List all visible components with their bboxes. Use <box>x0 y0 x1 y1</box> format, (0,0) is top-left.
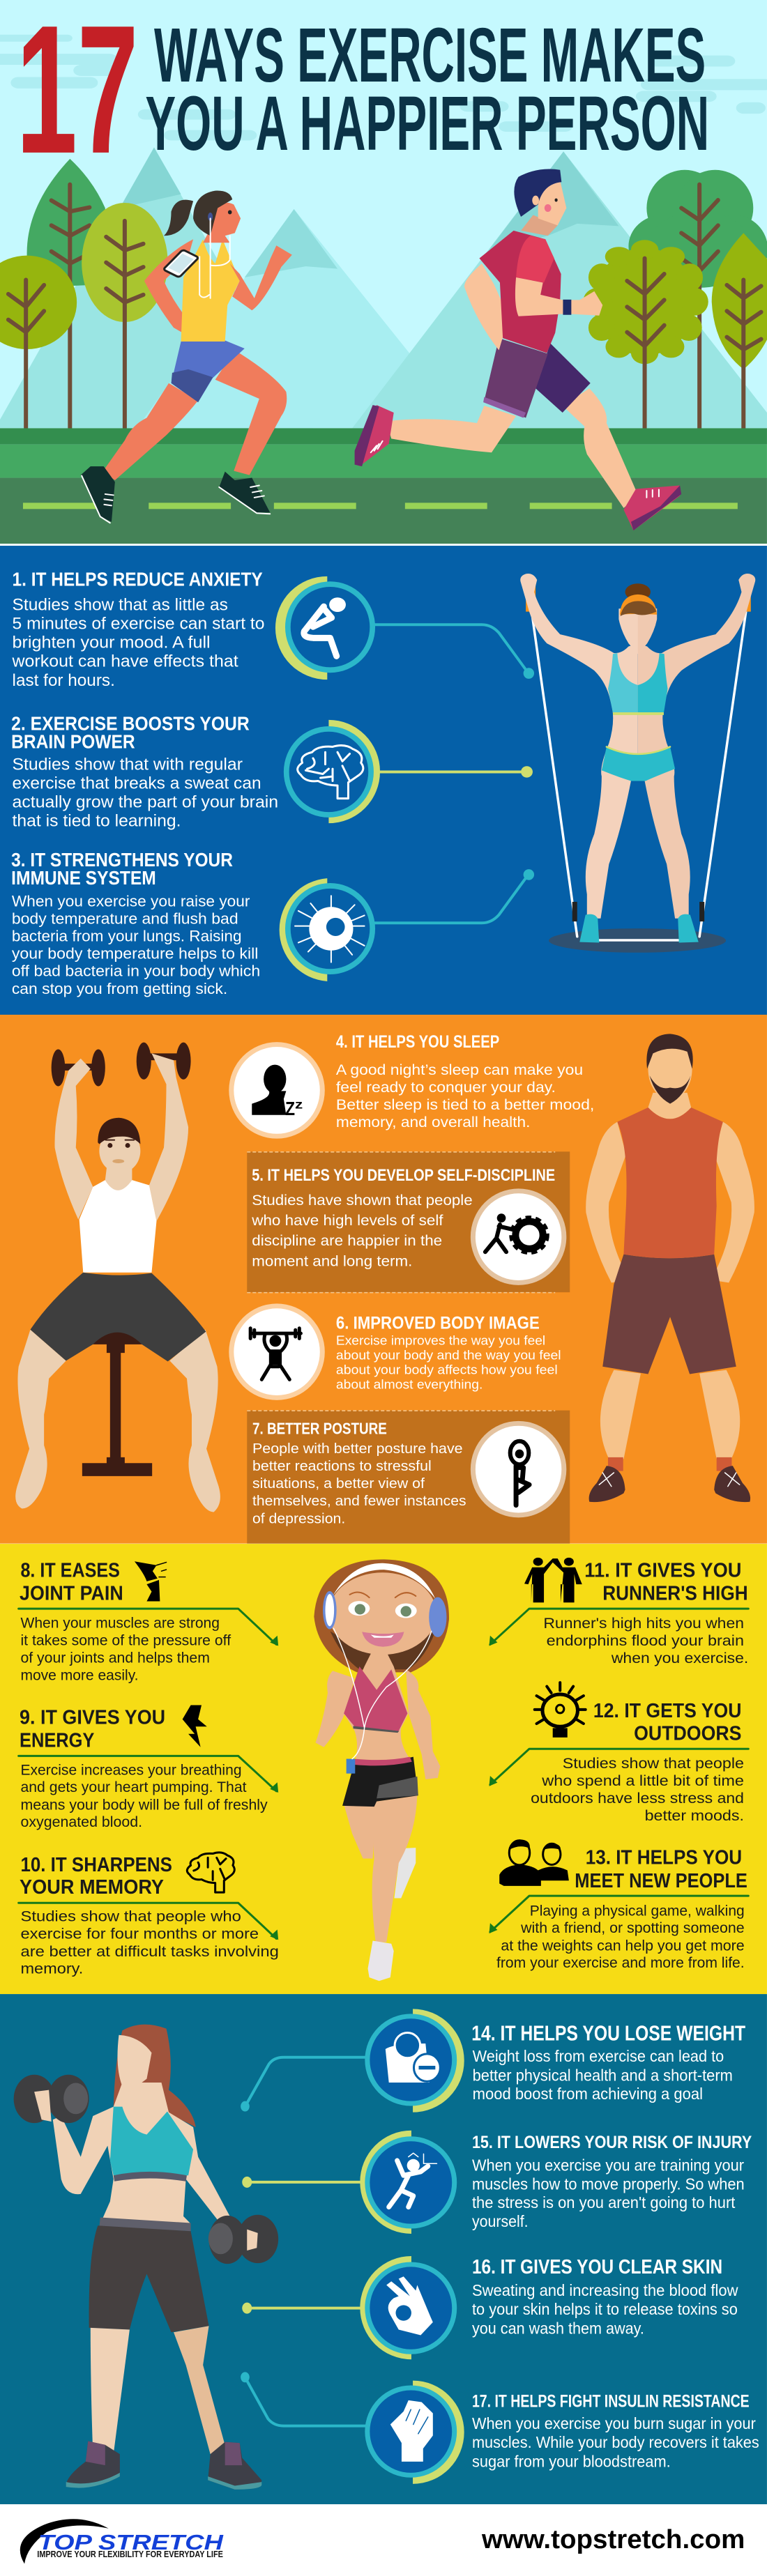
tip 1 <box>12 569 265 689</box>
text block 2: actually grow the part of your brain <box>13 792 278 811</box>
panel: brown box tip 7 <box>247 1411 570 1544</box>
text block 4: Better sleep is tied to a better mood, <box>336 1096 594 1113</box>
illustration: female runner <box>81 191 292 523</box>
text block 5: who have high levels of self <box>251 1211 443 1229</box>
heading 9 <box>20 1706 165 1751</box>
text block 7: People with better posture have <box>252 1441 463 1457</box>
heading 5: 5. IT HELPS YOU DEVELOP SELF-DISCIPLINE <box>252 1166 555 1185</box>
text block 3: can stop you from getting sick. <box>12 980 227 997</box>
text block 17: sugar from your bloodstream. <box>472 2452 671 2470</box>
heading 11 <box>584 1559 748 1604</box>
text block 2: Studies show that with regular <box>13 754 243 774</box>
icon: sleep <box>229 1042 325 1139</box>
icon: person pushing gear <box>471 1188 566 1285</box>
illustration: woman with resistance bands <box>520 574 755 953</box>
text block 5: moment and long term. <box>252 1252 412 1269</box>
heading 2 <box>11 713 250 753</box>
icon: OK hand <box>360 2256 457 2359</box>
text block 6: about your body and the way you feel <box>336 1348 561 1362</box>
text block 1: brighten your mood. A full <box>13 632 211 652</box>
icon: two people <box>499 1839 569 1886</box>
text block 6: about your body affects how you feel <box>336 1363 558 1377</box>
clouds <box>0 35 767 140</box>
text block 8 <box>20 1615 231 1683</box>
heading 2: BRAIN POWER <box>11 731 135 753</box>
tip 12 <box>531 1699 744 1824</box>
tip 16 <box>472 2255 738 2338</box>
text block 1: workout can have effects that <box>12 651 238 670</box>
text block 3: bacteria from your lungs. Raising <box>12 928 242 945</box>
tree: olive bumpy <box>583 240 708 434</box>
heading 9: 9. IT GIVES YOU <box>20 1706 165 1728</box>
ground <box>0 428 767 544</box>
text block 4: feel ready to conquer your day. <box>336 1078 556 1096</box>
tree: olive oval <box>82 203 168 434</box>
text block 9 <box>20 1762 268 1830</box>
tree: olive leaf far right <box>712 233 767 436</box>
tip 8 <box>20 1559 231 1683</box>
tip 3 <box>11 849 260 997</box>
text block 7: of depression. <box>252 1511 345 1527</box>
panel: hero header with runners <box>0 0 767 544</box>
icon: raised fist <box>365 2381 464 2484</box>
icon: brain outline <box>187 1853 234 1892</box>
text block 4 <box>336 1061 594 1130</box>
text block 3: body temperature and flush bad <box>12 910 238 928</box>
text block 2: that is tied to learning. <box>13 811 181 830</box>
heading 10: 10. IT SHARPENS <box>20 1853 172 1876</box>
heading 6: 6. IMPROVED BODY IMAGE <box>336 1313 540 1333</box>
heading 3: 3. IT STRENGTHENS YOUR <box>11 849 233 871</box>
text block 8: When your muscles are strong <box>20 1615 220 1632</box>
text block 7: themselves, and fewer instances <box>252 1493 466 1509</box>
text block 8: of your joints and helps them <box>20 1650 210 1666</box>
logo: Top Stretch: IMPROVE YOUR FLEXIBILITY FOR EVERYDAY LIFE <box>37 2550 223 2559</box>
heading 10: YOUR MEMORY <box>20 1876 164 1899</box>
heading 13 <box>575 1846 747 1892</box>
tree: olive round <box>0 256 77 436</box>
tip 14 <box>471 2021 745 2103</box>
heading 1: 1. IT HELPS REDUCE ANXIETY <box>13 569 263 590</box>
text block 9: and gets your heart pumping. That <box>20 1779 247 1795</box>
text block 2 <box>13 754 278 830</box>
tip 10 <box>20 1853 279 1977</box>
tip 15 <box>472 2133 752 2230</box>
text block 9: oxygenated blood. <box>20 1814 142 1830</box>
heading 12 <box>593 1699 741 1745</box>
tip 4 <box>336 1033 594 1130</box>
text block 10: memory. <box>20 1961 83 1977</box>
text block 14 <box>473 2047 733 2103</box>
text block 3: When you exercise you raise your <box>12 893 250 910</box>
panel: blue section tips 1-3 <box>0 546 767 1015</box>
text block 4: memory, and overall health. <box>336 1114 530 1130</box>
text block 5 <box>251 1191 473 1269</box>
icon: weight scale <box>365 2009 464 2113</box>
icon: injury <box>360 2131 457 2234</box>
tip 5 <box>251 1166 555 1269</box>
illustration: woman with dumbbells <box>14 2025 278 2490</box>
heading 9: ENERGY <box>20 1729 94 1751</box>
text block 7: situations, a better view of <box>252 1475 425 1492</box>
text block 6: about almost everything. <box>336 1377 483 1392</box>
icon: tree pose <box>471 1421 566 1517</box>
text block 8: it takes some of the pressure off <box>20 1632 231 1648</box>
text block 6: Exercise improves the way you feel <box>336 1333 545 1347</box>
tip 13 <box>496 1846 747 1971</box>
tree: tall green left <box>27 159 105 434</box>
heading 3 <box>11 849 233 889</box>
illustration: male runner <box>355 169 681 530</box>
tree: green cluster right <box>628 170 767 435</box>
text block 2: exercise that breaks a sweat can <box>13 773 261 792</box>
icon: brain <box>284 720 380 823</box>
mountains <box>0 147 767 428</box>
text block 10: Studies show that people who <box>20 1909 241 1925</box>
text block 11 <box>543 1616 748 1666</box>
panel: footer <box>0 2504 767 2576</box>
illustration: man with dumbbells on bench <box>15 1043 220 1512</box>
connectors <box>374 624 534 923</box>
text block 6 <box>336 1333 561 1392</box>
text block 7 <box>252 1441 466 1527</box>
icon: immune cell <box>280 878 375 981</box>
text block 8: move more easily. <box>20 1667 139 1683</box>
illustration: bearded man standing <box>586 1034 754 1502</box>
icon: sleep: z <box>295 1097 303 1112</box>
text block 1: last for hours. <box>13 670 115 689</box>
heading 4: 4. IT HELPS YOU SLEEP <box>336 1033 499 1052</box>
illustration: girl jogging with headphones <box>314 1559 449 1981</box>
panel: teal section tips 14-17 <box>0 1994 767 2504</box>
text block 5: Studies have shown that people <box>252 1191 473 1209</box>
heading 8: 8. IT EASES <box>20 1559 120 1581</box>
panel: brown box tip 5 <box>247 1151 570 1293</box>
text block 17 <box>472 2414 759 2470</box>
heading 2: 2. EXERCISE BOOSTS YOUR <box>11 713 250 735</box>
text block 10 <box>20 1909 279 1977</box>
text block 10: are better at difficult tasks involving <box>20 1944 279 1960</box>
text block 3 <box>12 893 260 997</box>
text block 1: Studies show that as little as <box>13 595 228 614</box>
text block 13 <box>496 1903 745 1971</box>
panel: orange section tips 4-7 <box>0 1015 767 1544</box>
tip 11 <box>543 1559 748 1666</box>
text block 1 <box>12 595 265 689</box>
logo: Top Stretch <box>20 2519 224 2563</box>
icon: high five <box>524 1558 582 1602</box>
text block 4: A good night’s sleep can make you <box>336 1061 583 1078</box>
heading 8 <box>20 1559 123 1604</box>
heading 3: IMMUNE SYSTEM <box>11 867 156 889</box>
text block 16: you can wash them away. <box>472 2319 644 2338</box>
icon: lightning bolt <box>183 1705 207 1747</box>
text block 5: discipline are happier in the <box>252 1232 442 1249</box>
icon: weightlifter <box>229 1303 325 1400</box>
text block 7: better reactions to stressful <box>252 1458 432 1474</box>
icon: anxious person <box>275 576 375 680</box>
icon: sleep: Z <box>285 1098 295 1119</box>
panel: yellow section tips 8-13 <box>0 1544 767 1994</box>
text block 10: exercise for four months or more <box>20 1926 259 1942</box>
tip 7 <box>252 1420 466 1527</box>
icon: joint pain <box>135 1561 167 1602</box>
heading 10 <box>20 1853 172 1899</box>
title: main heading <box>145 12 709 167</box>
tip 9 <box>20 1706 268 1830</box>
tip 6 <box>336 1313 561 1392</box>
heading 7: 7. BETTER POSTURE <box>252 1420 387 1438</box>
tip 17 <box>472 2391 759 2470</box>
text block 15 <box>472 2156 745 2230</box>
text block 15: yourself. <box>472 2211 529 2230</box>
tip 2 <box>11 713 278 830</box>
text block 16 <box>472 2281 738 2338</box>
text block 9: Exercise increases your breathing <box>20 1762 242 1778</box>
icon: light bulb <box>535 1682 586 1738</box>
text block 3: off bad bacteria in your body which <box>12 963 260 980</box>
text block 3: your body temperature helps to kill <box>12 945 258 963</box>
text block 12 <box>531 1756 744 1824</box>
logo: Top Stretch: TOP STRETCH <box>38 2530 224 2554</box>
text block 9: means your body will be full of freshly <box>20 1797 268 1813</box>
heading 8: JOINT PAIN <box>20 1582 123 1604</box>
connectors <box>241 2057 366 2426</box>
arrows <box>19 1609 748 1940</box>
text block 1: 5 minutes of exercise can start to <box>13 613 265 633</box>
